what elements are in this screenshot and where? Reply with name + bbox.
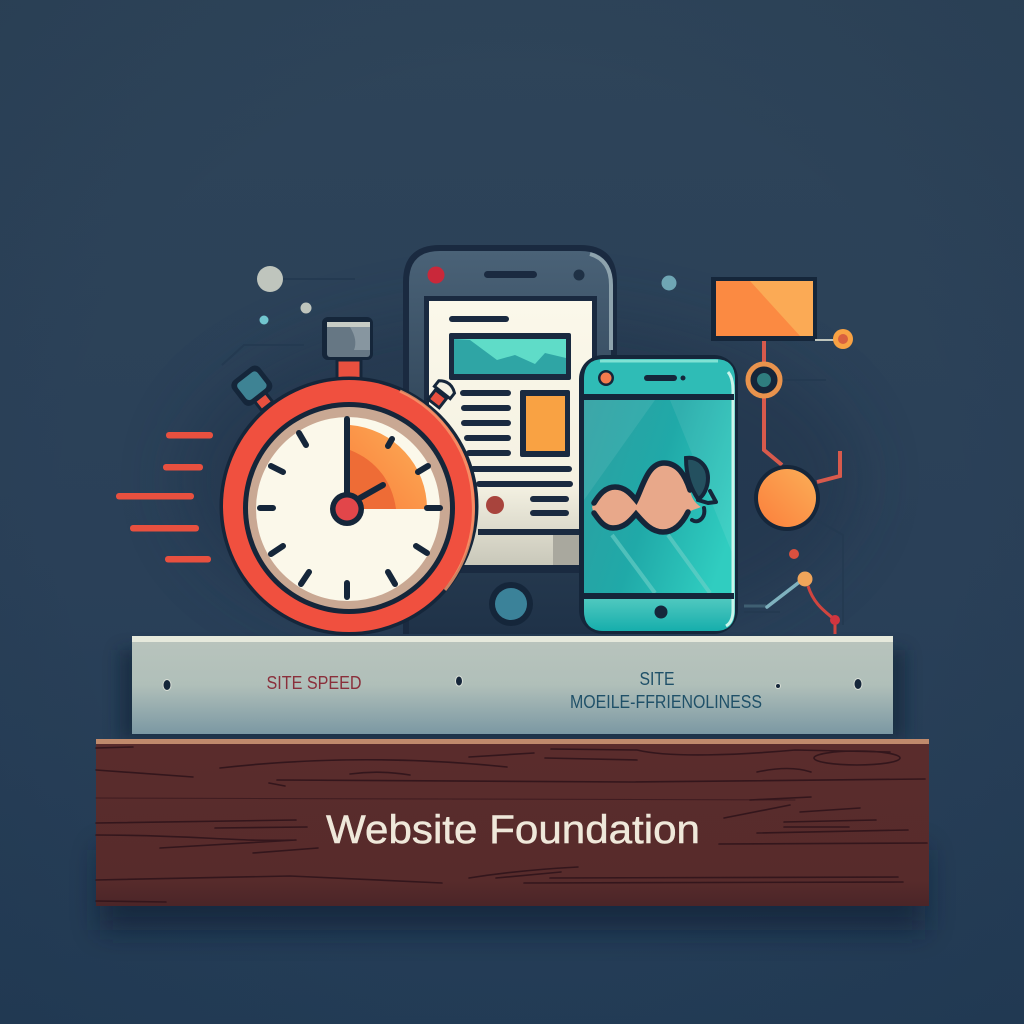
right side button	[426, 378, 457, 410]
shadow under plate	[120, 650, 905, 740]
front phone top bar	[584, 370, 734, 400]
label: site mobile-friendliness: MOEILE-FFRIENOLINESS	[570, 692, 762, 712]
plate rivets	[163, 676, 862, 690]
shadow under wood	[100, 850, 925, 930]
wooden base	[96, 739, 929, 906]
front phone bottom bar	[584, 593, 734, 618]
foundation title: Website Foundation	[326, 808, 700, 852]
article screen	[424, 296, 597, 570]
label: site mobile-friendliness	[570, 669, 762, 712]
back phone with article screen	[403, 245, 617, 634]
image block	[449, 333, 571, 380]
speed lines	[116, 432, 213, 562]
orange elapsed wedge	[350, 425, 427, 509]
flow diagram	[711, 277, 853, 634]
ring node	[748, 364, 780, 396]
small chart line	[744, 572, 840, 634]
card connector	[815, 329, 853, 349]
front phone	[579, 355, 738, 634]
cloud blob illustration	[592, 458, 716, 532]
text lines	[460, 390, 592, 535]
large orange node	[754, 465, 820, 531]
wood grain	[96, 747, 927, 902]
tick marks	[260, 433, 440, 597]
clock hands	[330, 419, 383, 526]
label: site mobile-friendliness: SITE	[640, 669, 674, 689]
metal plate	[132, 636, 893, 734]
decorative dots and lines	[222, 266, 843, 625]
label: site speed: SITE SPEED	[266, 673, 362, 693]
orange card	[711, 277, 817, 341]
home button	[489, 582, 533, 626]
stopwatch	[220, 317, 478, 636]
back phone camera and speaker	[428, 266, 584, 284]
left side button	[229, 363, 281, 417]
stopwatch crown	[322, 317, 373, 380]
orange block	[520, 390, 570, 457]
